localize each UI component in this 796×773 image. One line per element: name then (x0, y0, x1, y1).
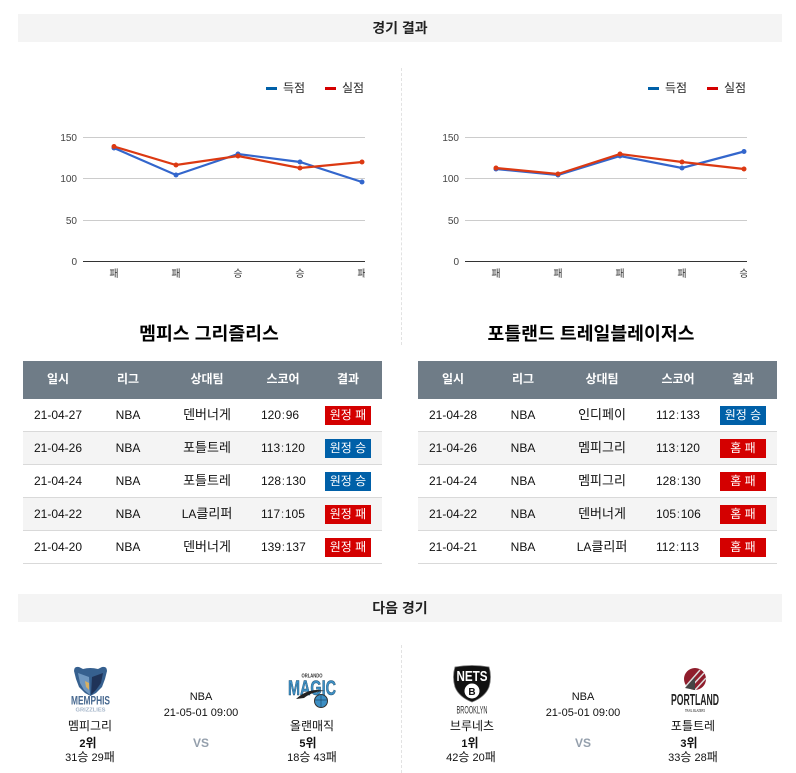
row 2: 원정 승 (330, 441, 366, 455)
result labels on x axis: 패 (357, 268, 367, 280)
heading: game results (18, 14, 782, 42)
row 5: 홈 패 (730, 540, 756, 554)
text: Portland rank: 3위 (680, 736, 698, 750)
table header: 결과 (337, 372, 359, 386)
row 5: LA클리퍼 (577, 539, 627, 554)
result labels on x axis: 승 (739, 268, 749, 280)
series: points allowed (494, 152, 746, 176)
row 3: 원정 승 (330, 474, 366, 488)
table header: 일시 (442, 372, 464, 386)
icon: Portland Trail Blazers logo (671, 668, 719, 713)
row 4 (23, 498, 382, 531)
table header: 리그 (512, 372, 534, 386)
axes and gridlines: 100 (442, 174, 459, 185)
row 3: 128:130 (261, 474, 306, 488)
row 5: 112:113 (656, 540, 699, 554)
row 5: 139:137 (261, 540, 306, 554)
row 1: NBA (511, 408, 535, 422)
axes and gridlines: 0 (453, 257, 459, 268)
result labels on x axis: 패 (171, 268, 181, 280)
text: Brooklyn rank: 1위 (461, 736, 479, 750)
legend: Portland chart (648, 81, 746, 95)
row 1: 원정 승 (725, 408, 761, 422)
team title: Memphis: 멤피스 그리즐리스 (139, 323, 279, 344)
row 4: NBA (116, 507, 140, 521)
row 2: NBA (511, 441, 535, 455)
row 3: NBA (511, 474, 535, 488)
row 1: 원정 패 (330, 408, 366, 422)
axes and gridlines: 50 (448, 216, 459, 227)
row 3: 21-04-24 (34, 474, 82, 488)
icon: Brooklyn Nets logo: B (468, 687, 476, 698)
icon: Portland Trail Blazers logo: TRAIL BLAZERS (685, 708, 705, 713)
row 2 (418, 432, 777, 465)
row 5 (418, 531, 777, 564)
row 3 (23, 465, 382, 498)
row 4: LA클리퍼 (182, 506, 232, 521)
legend: Memphis chart: 실점 (342, 81, 364, 95)
row 1: 21-04-27 (34, 408, 82, 422)
heading: next games: 다음 경기 (372, 600, 428, 616)
text: right match date: 21-05-01 09:00 (546, 707, 620, 719)
icon: Orlando Magic logo (288, 674, 336, 708)
icon: Memphis Grizzlies logo (71, 666, 110, 713)
icon: Brooklyn Nets logo (453, 665, 491, 715)
text: Portland record: 33승 28패 (668, 750, 718, 764)
table: Portland recent games (418, 361, 777, 564)
legend: Memphis chart: 득점 (283, 81, 305, 95)
text: Memphis rank: 2위 (79, 736, 97, 750)
series: points allowed (112, 144, 364, 170)
axes and gridlines: 150 (442, 133, 459, 144)
row 4: 21-04-22 (34, 507, 82, 521)
row 5: NBA (511, 540, 535, 554)
text: right match league: NBA (572, 691, 594, 703)
row 3: 128:130 (656, 474, 701, 488)
text: Memphis team name: 멤피그리 (68, 719, 112, 733)
result labels on x axis: 승 (295, 268, 305, 280)
axes and gridlines: 150 (60, 133, 77, 144)
line chart: Portland Trail Blazers (442, 81, 749, 280)
axes and gridlines: 100 (60, 174, 77, 185)
text: Orlando team name: 올랜매직 (290, 719, 334, 733)
row 1 (23, 399, 382, 432)
row 4: 원정 패 (330, 507, 366, 521)
text: Brooklyn team name: 브루네츠 (450, 719, 494, 733)
table header: 리그 (117, 372, 139, 386)
table header (23, 361, 382, 399)
result labels on x axis: 패 (109, 268, 119, 280)
legend: Portland chart: 득점 (665, 81, 687, 95)
result labels on x axis (109, 268, 367, 280)
table header: 스코어 (266, 372, 300, 386)
row 1: 인디페이 (578, 407, 626, 422)
result labels on x axis: 패 (615, 268, 625, 280)
result labels on x axis (491, 268, 749, 280)
row 4: 105:106 (656, 507, 701, 521)
axes and gridlines: 50 (66, 216, 77, 227)
row 3: 멤피그리 (578, 473, 626, 488)
row 3: 포틀트레 (183, 473, 231, 488)
row 1: NBA (116, 408, 140, 422)
text: Orlando record: 18승 43패 (287, 750, 337, 764)
row 1: 21-04-28 (429, 408, 477, 422)
series: points scored (494, 149, 746, 178)
heading: game results: 경기 결과 (372, 20, 428, 36)
row 3 (418, 465, 777, 498)
row 5 (23, 531, 382, 564)
table header (418, 361, 777, 399)
row 4: NBA (511, 507, 535, 521)
row 1 (418, 399, 777, 432)
row 3: NBA (116, 474, 140, 488)
row 1: 120:96 (261, 408, 299, 422)
text: Memphis record: 31승 29패 (65, 750, 115, 764)
row 4: 117:105 (261, 507, 305, 521)
row 2: 21-04-26 (429, 441, 477, 455)
axes and gridlines (442, 133, 747, 268)
row 1: 덴버너게 (183, 407, 231, 422)
table header: 상대팀 (190, 372, 224, 386)
table header: 상대팀 (585, 372, 619, 386)
row 5: 덴버너게 (183, 539, 231, 554)
row 5: NBA (116, 540, 140, 554)
row 4 (418, 498, 777, 531)
table header: 스코어 (661, 372, 695, 386)
row 2: 113:120 (261, 441, 305, 455)
table: Memphis recent games (23, 361, 382, 564)
heading: next games (18, 594, 782, 622)
legend: Memphis chart (266, 81, 364, 95)
row 5: 21-04-21 (429, 540, 477, 554)
table header: 결과 (732, 372, 754, 386)
text: Orlando rank: 5위 (299, 736, 317, 750)
result labels on x axis: 패 (677, 268, 687, 280)
axes and gridlines (60, 133, 365, 268)
row 2: 홈 패 (730, 441, 756, 455)
team title: Portland: 포틀랜드 트레일블레이저스 (488, 323, 694, 344)
axes and gridlines: 0 (71, 257, 77, 268)
icon: Orlando Magic logo: ORLANDO (302, 674, 323, 680)
line chart: Memphis Grizzlies (60, 81, 367, 280)
row 2: 멤피그리 (578, 440, 626, 455)
text: right match versus: VS (575, 736, 591, 750)
text: left match date: 21-05-01 09:00 (164, 707, 238, 719)
legend: Portland chart: 실점 (724, 81, 746, 95)
row 1: 112:133 (656, 408, 700, 422)
row 2: 113:120 (656, 441, 700, 455)
row 5: 21-04-20 (34, 540, 82, 554)
text: left match league: NBA (190, 691, 212, 703)
row 3: 21-04-24 (429, 474, 477, 488)
row 2 (23, 432, 382, 465)
row 2: NBA (116, 441, 140, 455)
series: points scored (112, 146, 364, 184)
row 4: 덴버너게 (578, 506, 626, 521)
text: Portland team name: 포틀트레 (671, 719, 715, 733)
row 4: 21-04-22 (429, 507, 477, 521)
row 2: 포틀트레 (183, 440, 231, 455)
row 2: 21-04-26 (34, 441, 82, 455)
result labels on x axis: 승 (233, 268, 243, 280)
row 3: 홈 패 (730, 474, 756, 488)
row 4: 홈 패 (730, 507, 756, 521)
result labels on x axis: 패 (491, 268, 501, 280)
text: Brooklyn record: 42승 20패 (446, 750, 496, 764)
table header: 일시 (47, 372, 69, 386)
row 5: 원정 패 (330, 540, 366, 554)
result labels on x axis: 패 (553, 268, 563, 280)
text: left match versus: VS (193, 736, 209, 750)
